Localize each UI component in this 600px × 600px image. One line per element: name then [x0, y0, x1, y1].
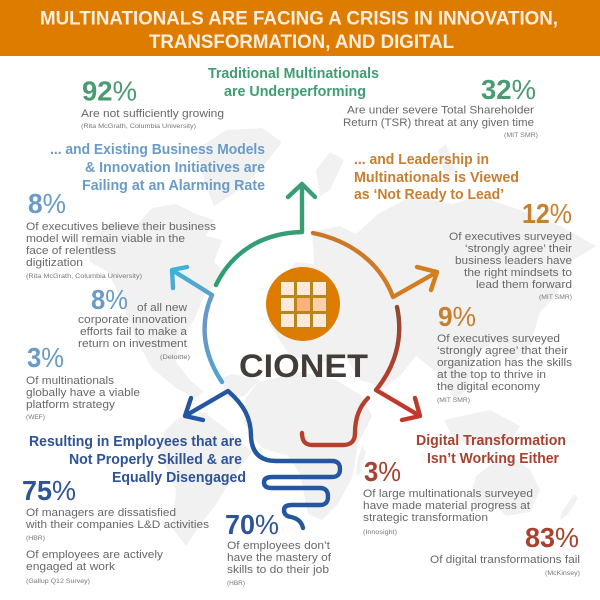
arrow: light blue left — [172, 267, 222, 382]
stat 32%: (MIT SMR) — [504, 133, 538, 139]
stat 70%: 70% — [225, 509, 279, 540]
stat 9%: ‘strongly agree’ that their — [437, 345, 568, 357]
stat 3% platform: Of multinationals — [26, 375, 114, 387]
stat 12%: lead them forward — [476, 279, 572, 291]
stat 12%: ‘strongly agree’ their — [465, 243, 572, 255]
heading — [29, 434, 246, 486]
panel: digital transformation — [363, 433, 580, 577]
stat 9%: Of executives surveyed — [437, 333, 560, 345]
stat 75% — [22, 475, 209, 585]
stat 75%: engaged at work — [26, 561, 115, 573]
heading: Multinationals is Viewed — [354, 170, 519, 186]
lightbulb arrows diagram — [172, 184, 437, 528]
title — [40, 8, 558, 53]
stat 92% — [81, 76, 224, 130]
stat 12%: (MIT SMR) — [539, 295, 572, 301]
heading: ... and Existing Business Models — [50, 142, 265, 158]
stat 8% business model — [26, 188, 216, 280]
stat 9%: the digital economy — [437, 381, 540, 393]
stat 75%: Of managers are dissatisfied — [26, 507, 176, 519]
stat 32%: Are under severe Total Shareholder — [347, 104, 534, 116]
stat 3% transformation: have made material progress at — [363, 500, 531, 512]
stat 12%: the right mindsets to — [464, 267, 572, 279]
stat 12%: 12% — [522, 198, 572, 229]
stat 8% business model: model will remain viable in the — [26, 233, 185, 245]
heading — [416, 433, 566, 467]
stat 32%: Return (TSR) threat at any given time — [343, 117, 534, 129]
stat 3% transformation: (Innosight) — [363, 530, 397, 536]
stat 92%: (Rita McGrath, Columbia University) — [81, 124, 196, 130]
stat 8% business model: (Rita McGrath, Columbia University) — [26, 274, 142, 280]
heading: Digital Transformation — [416, 433, 566, 449]
heading: Equally Disengaged — [112, 470, 246, 486]
stat 8% innovation — [78, 284, 190, 361]
stat 12%: business leaders have — [455, 255, 572, 267]
stat 92%: 92% — [82, 76, 137, 106]
panel: leadership — [354, 152, 572, 404]
stat 8% innovation: efforts fail to make a — [80, 326, 188, 338]
stat 8% innovation: corporate innovation — [78, 314, 187, 326]
stat 3% transformation: 3% — [364, 456, 401, 487]
heading: Resulting in Employees that are — [29, 434, 242, 450]
panel: business models — [26, 142, 265, 421]
stat 9%: at the top to thrive in — [437, 369, 546, 381]
stat 32%: 32% — [481, 74, 536, 105]
stat 70%: Of employees don’t — [227, 540, 331, 552]
stat 70%: have the mastery of — [227, 552, 332, 564]
stat 3% platform: (WEF) — [26, 415, 45, 421]
heading: Traditional Multinationals — [208, 66, 379, 82]
stat 92%: Are not sufficiently growing — [81, 108, 224, 120]
arrow and bulb filament: dark blue — [185, 391, 340, 528]
stat 9%: (MIT SMR) — [437, 398, 470, 404]
stat 70% — [225, 509, 332, 587]
stat 3% transformation — [363, 456, 533, 536]
heading: as ‘Not Ready to Lead’ — [354, 187, 504, 203]
stat 75%: Of employees are actively — [26, 549, 163, 561]
stat 75%: (Gallup Q12 Survey) — [26, 579, 90, 585]
stat 9%: 9% — [438, 301, 476, 332]
stat 9%: organization has the skills — [437, 357, 572, 369]
title: MULTINATIONALS ARE FACING A CRISIS IN INNOVATION, — [40, 8, 558, 30]
stat 70%: skills to do their job — [227, 564, 329, 576]
heading: Isn’t Working Either — [427, 451, 559, 467]
stat 8% innovation: (Deloitte) — [160, 355, 190, 361]
heading: are Underperforming — [224, 84, 366, 100]
stat 75%: with their companies L&D activities — [25, 519, 209, 531]
heading — [208, 66, 379, 100]
stat 8% innovation: 8% — [91, 284, 128, 315]
stat 83%: 83% — [525, 522, 579, 553]
heading: ... and Leadership in — [354, 152, 489, 168]
heading: Failing at an Alarming Rate — [82, 178, 265, 194]
panel: traditional multinationals — [81, 66, 538, 139]
stat 75%: (HBR) — [26, 536, 45, 542]
stat 3% transformation: strategic transformation — [363, 512, 488, 524]
icon: CIONET logo — [266, 267, 340, 341]
arrow: red lower right — [376, 307, 420, 420]
bulb base: red — [302, 398, 368, 445]
stat 8% business model: 8% — [28, 188, 66, 219]
world map background — [86, 128, 596, 546]
stat 8% business model: digitization — [26, 257, 83, 269]
heading: Not Properly Skilled & are — [69, 452, 242, 468]
stat 75%: 75% — [22, 475, 76, 506]
heading — [354, 152, 519, 203]
header banner — [0, 0, 600, 56]
stat 3% platform: 3% — [27, 342, 64, 373]
stat 3% platform: globally have a viable — [26, 387, 140, 399]
arrow: green up — [216, 184, 315, 285]
stat 8% business model: Of executives believe their business — [26, 221, 216, 233]
panel: employees — [22, 434, 332, 587]
stat 83%: Of digital transformations fail — [430, 554, 580, 566]
stat 83% — [430, 522, 580, 577]
stat 3% platform: platform strategy — [26, 399, 115, 411]
stat 8% innovation: return on investment — [78, 338, 188, 350]
heading — [50, 142, 265, 194]
stat 12% — [449, 198, 572, 301]
title: TRANSFORMATION, AND DIGITAL — [149, 32, 454, 53]
stat 8% innovation: of all new — [137, 302, 188, 314]
stat 3% platform — [26, 342, 140, 421]
stat 32% — [343, 74, 538, 139]
stat 12%: Of executives surveyed — [449, 231, 572, 243]
heading: & Innovation Initiatives are — [85, 160, 265, 176]
arrow: orange right — [313, 233, 437, 297]
stat 9% — [437, 301, 572, 404]
stat 83%: (McKinsey) — [545, 571, 580, 577]
stat 3% transformation: Of large multinationals surveyed — [363, 488, 533, 500]
logo wordmark: CIONET — [239, 348, 368, 384]
stat 8% business model: face of relentless — [26, 245, 116, 257]
stat 70%: (HBR) — [227, 581, 245, 587]
